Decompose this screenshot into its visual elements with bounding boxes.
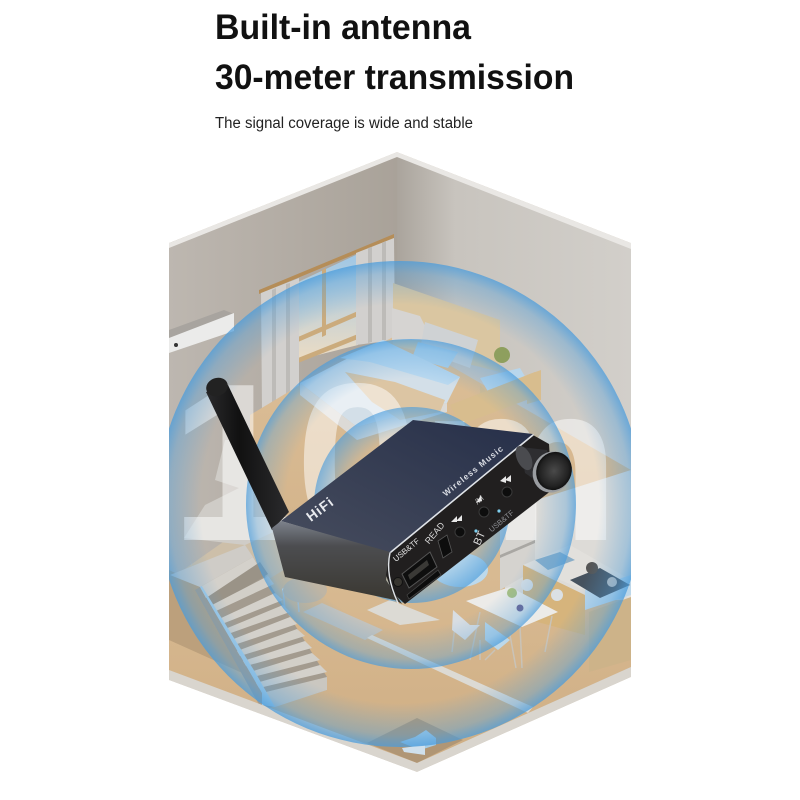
side table — [282, 577, 327, 612]
device side face — [272, 521, 402, 604]
big translucent 10m: 10m — [170, 336, 620, 588]
title: 30-meter transmission — [215, 58, 574, 97]
wall top edges — [169, 152, 631, 249]
volume knob — [512, 443, 578, 499]
interior base fill — [169, 152, 631, 772]
USB port — [402, 552, 437, 588]
left wall — [169, 155, 397, 580]
title: Built-in antenna — [215, 8, 472, 47]
port label BT: BT — [471, 529, 488, 547]
kitchen counter — [523, 552, 631, 635]
white platform strip — [367, 600, 533, 713]
device top face — [281, 420, 533, 553]
dining table and chairs — [452, 579, 563, 668]
signal wave middle — [246, 339, 576, 669]
antenna — [204, 375, 289, 530]
button arrows — [451, 475, 511, 522]
cutaway house illustration — [157, 152, 643, 772]
device: wireless music receiver — [204, 375, 578, 604]
lower left wall — [169, 570, 240, 672]
headboard — [393, 283, 500, 372]
window — [259, 234, 394, 363]
foundation — [169, 667, 631, 772]
indicator LEDs — [474, 509, 501, 533]
port label READ: READ — [423, 520, 447, 546]
curtains — [261, 238, 395, 410]
subtitle: The signal coverage is wide and stable — [215, 115, 473, 132]
bathtub — [436, 554, 488, 587]
brand label Wireless Music: Wireless Music — [441, 443, 506, 498]
device front panel — [386, 435, 552, 604]
wooden bed frame — [487, 370, 541, 404]
port label USB&TF dim: USB&TF — [487, 508, 516, 534]
mode label: /M — [473, 494, 486, 506]
control buttons — [455, 487, 512, 537]
bedside table and plant — [480, 347, 524, 390]
title — [215, 8, 574, 97]
fridge — [500, 526, 535, 590]
reset hole — [394, 578, 402, 586]
entry recess with shoes — [367, 718, 463, 763]
silver edges — [389, 435, 533, 603]
port label USB&TF: USB&TF — [391, 536, 421, 564]
signal wave outer — [157, 261, 643, 747]
upper floor — [250, 338, 631, 516]
brand label HiFi: HiFi — [303, 493, 337, 525]
ground floor wood — [169, 549, 631, 762]
air conditioner — [169, 310, 234, 353]
kitchen wall — [505, 470, 631, 600]
upper stair flight — [170, 440, 278, 587]
signal wave inner — [314, 407, 510, 603]
TF card slot — [407, 570, 441, 599]
right wall — [397, 157, 631, 470]
rug stripes — [303, 603, 383, 640]
type-C port — [438, 535, 452, 558]
bed — [300, 340, 460, 440]
staircase — [190, 557, 327, 710]
pillows — [392, 308, 478, 368]
